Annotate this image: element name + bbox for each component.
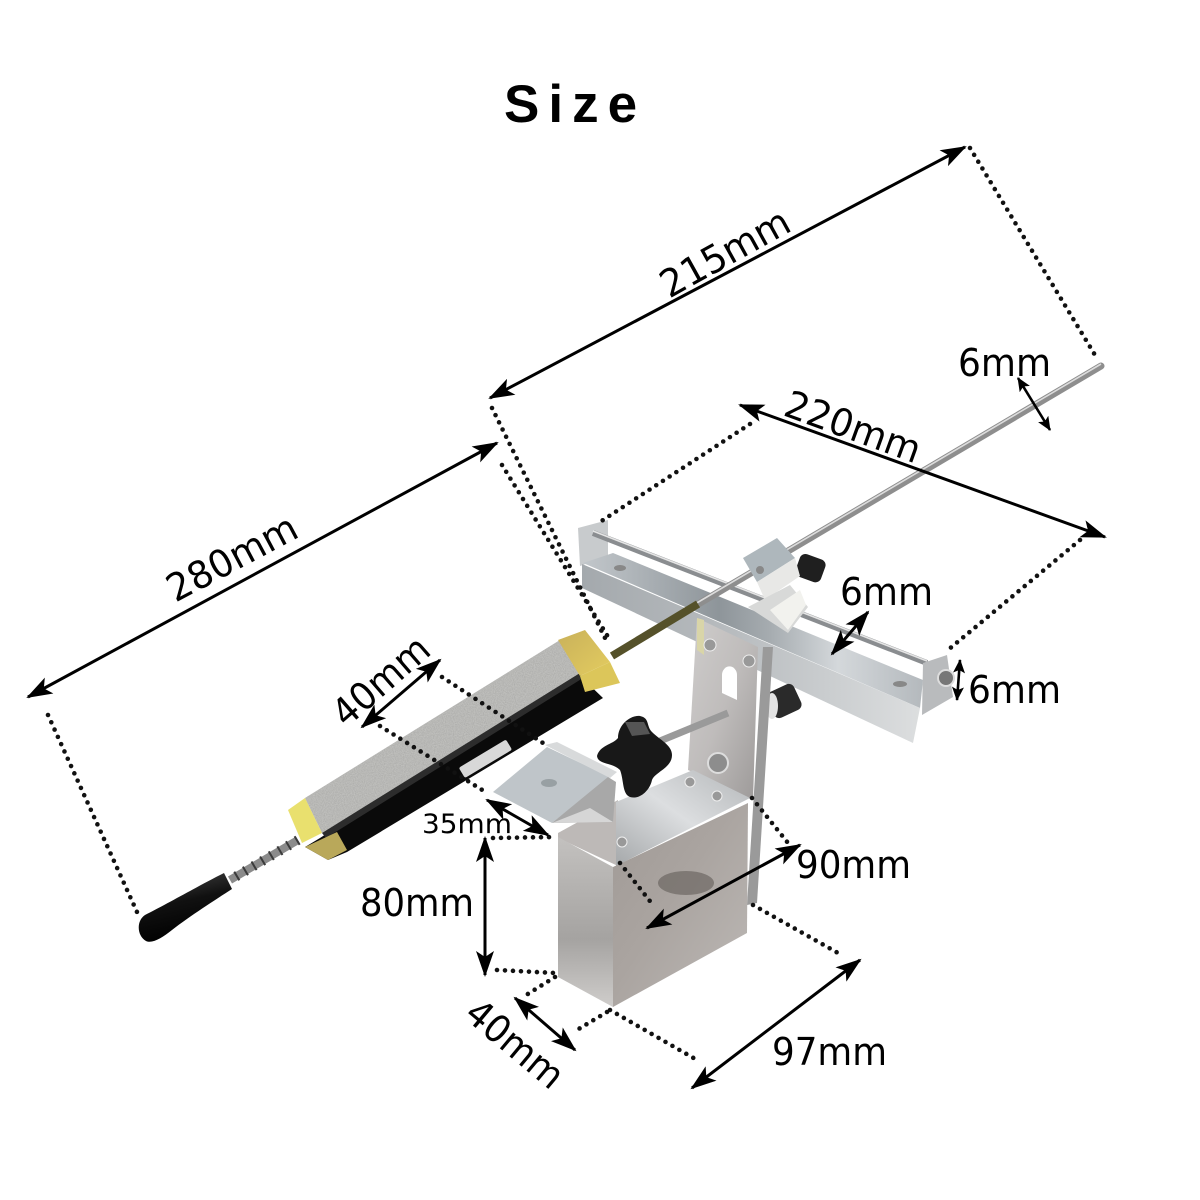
tightening screw and star knob — [597, 713, 728, 798]
dimension labels: 80mm — [360, 881, 474, 925]
dimension labels — [159, 199, 1061, 1098]
box housing — [558, 770, 750, 1007]
dimension labels: 40mm — [457, 990, 573, 1098]
dimension labels: 97mm — [772, 1030, 887, 1074]
dimension labels: 215mm — [652, 199, 798, 307]
rear knobs — [764, 552, 827, 720]
handle and spring — [139, 840, 298, 942]
dimension labels: 40mm — [323, 627, 439, 735]
dimension labels: 35mm — [422, 809, 512, 840]
dimension labels: 6mm — [840, 570, 933, 614]
guide rod — [612, 364, 1101, 656]
dimension labels: 90mm — [796, 843, 911, 887]
tilted clamp — [493, 742, 617, 823]
title: Size — [504, 75, 646, 134]
dimension arrows — [28, 147, 1105, 1088]
sharpener product photo — [139, 364, 1101, 1007]
sharpening stone holder — [288, 630, 620, 860]
rail assembly — [578, 520, 954, 743]
dimension labels: 6mm — [958, 341, 1051, 385]
slider block — [743, 538, 808, 633]
dimension labels: 220mm — [779, 382, 927, 472]
dotted extension lines — [48, 148, 1098, 1060]
dimension labels: 280mm — [159, 505, 305, 611]
dimension labels: 6mm — [968, 668, 1061, 712]
upright plate — [688, 618, 773, 905]
